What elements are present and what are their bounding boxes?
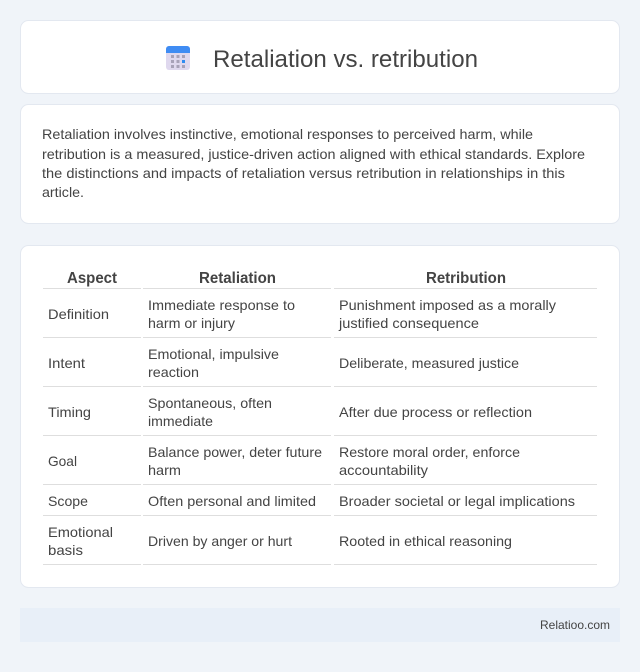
row: definition bbox=[48, 297, 556, 331]
row: scope: Often personal and limited bbox=[148, 493, 316, 509]
table header row: Retribution bbox=[426, 270, 506, 287]
text block: introduction: Retaliation involves instinctive, emotional responses to perceived harm, while bbox=[42, 126, 533, 142]
row: definition: harm or injury bbox=[148, 315, 235, 331]
panel: title card bbox=[20, 20, 620, 94]
row: goal: Goal bbox=[48, 453, 77, 469]
text block: introduction: article. bbox=[42, 184, 84, 200]
row: goal bbox=[48, 444, 520, 478]
row: intent bbox=[48, 346, 519, 380]
text block: introduction: the distinctions and impacts of retaliation versus retribution in relationships in this bbox=[42, 165, 565, 181]
row: definition: Punishment imposed as a morally bbox=[339, 297, 556, 313]
row: timing bbox=[48, 395, 532, 429]
text block: introduction bbox=[42, 126, 585, 200]
row: emotional basis: Emotional bbox=[48, 524, 113, 540]
row: emotional basis: Driven by anger or hurt bbox=[148, 533, 292, 549]
icon: calendar bbox=[166, 46, 190, 70]
row: definition: justified consequence bbox=[338, 315, 479, 331]
table header row: Retaliation bbox=[199, 270, 276, 287]
row: intent: Deliberate, measured justice bbox=[339, 355, 519, 371]
footer text: Relatioo.com bbox=[540, 618, 610, 632]
row: goal: Restore moral order, enforce bbox=[339, 444, 520, 460]
row: intent: reaction bbox=[148, 364, 199, 380]
row: timing: Timing bbox=[48, 404, 91, 420]
row: definition: Definition bbox=[48, 306, 109, 322]
row: emotional basis: basis bbox=[48, 542, 83, 558]
text block: introduction: retribution is a measured, justice-driven action aligned with ethical standards. Explore bbox=[42, 146, 585, 162]
panel: comparison table bbox=[20, 246, 620, 588]
row: timing: immediate bbox=[148, 413, 213, 429]
row: timing: After due process or reflection bbox=[339, 404, 532, 420]
table header row bbox=[67, 270, 506, 287]
row: definition: Immediate response to bbox=[148, 297, 295, 313]
row: scope: Scope bbox=[48, 493, 88, 509]
row: timing: Spontaneous, often bbox=[148, 395, 272, 411]
row: intent: Emotional, impulsive bbox=[148, 346, 279, 362]
row: scope bbox=[48, 493, 575, 509]
row: emotional basis bbox=[48, 524, 512, 558]
row: goal: Balance power, deter future bbox=[148, 444, 322, 460]
row: scope: Broader societal or legal implications bbox=[339, 493, 575, 509]
row: goal: accountability bbox=[339, 462, 428, 478]
title: Retaliation vs. retribution bbox=[213, 46, 478, 73]
row: intent: Intent bbox=[48, 355, 85, 371]
row: goal: harm bbox=[148, 462, 181, 478]
table header row: Aspect bbox=[67, 270, 118, 287]
row: emotional basis: Rooted in ethical reasoning bbox=[339, 533, 512, 549]
footer bbox=[20, 608, 620, 642]
panel: introduction bbox=[20, 104, 620, 224]
